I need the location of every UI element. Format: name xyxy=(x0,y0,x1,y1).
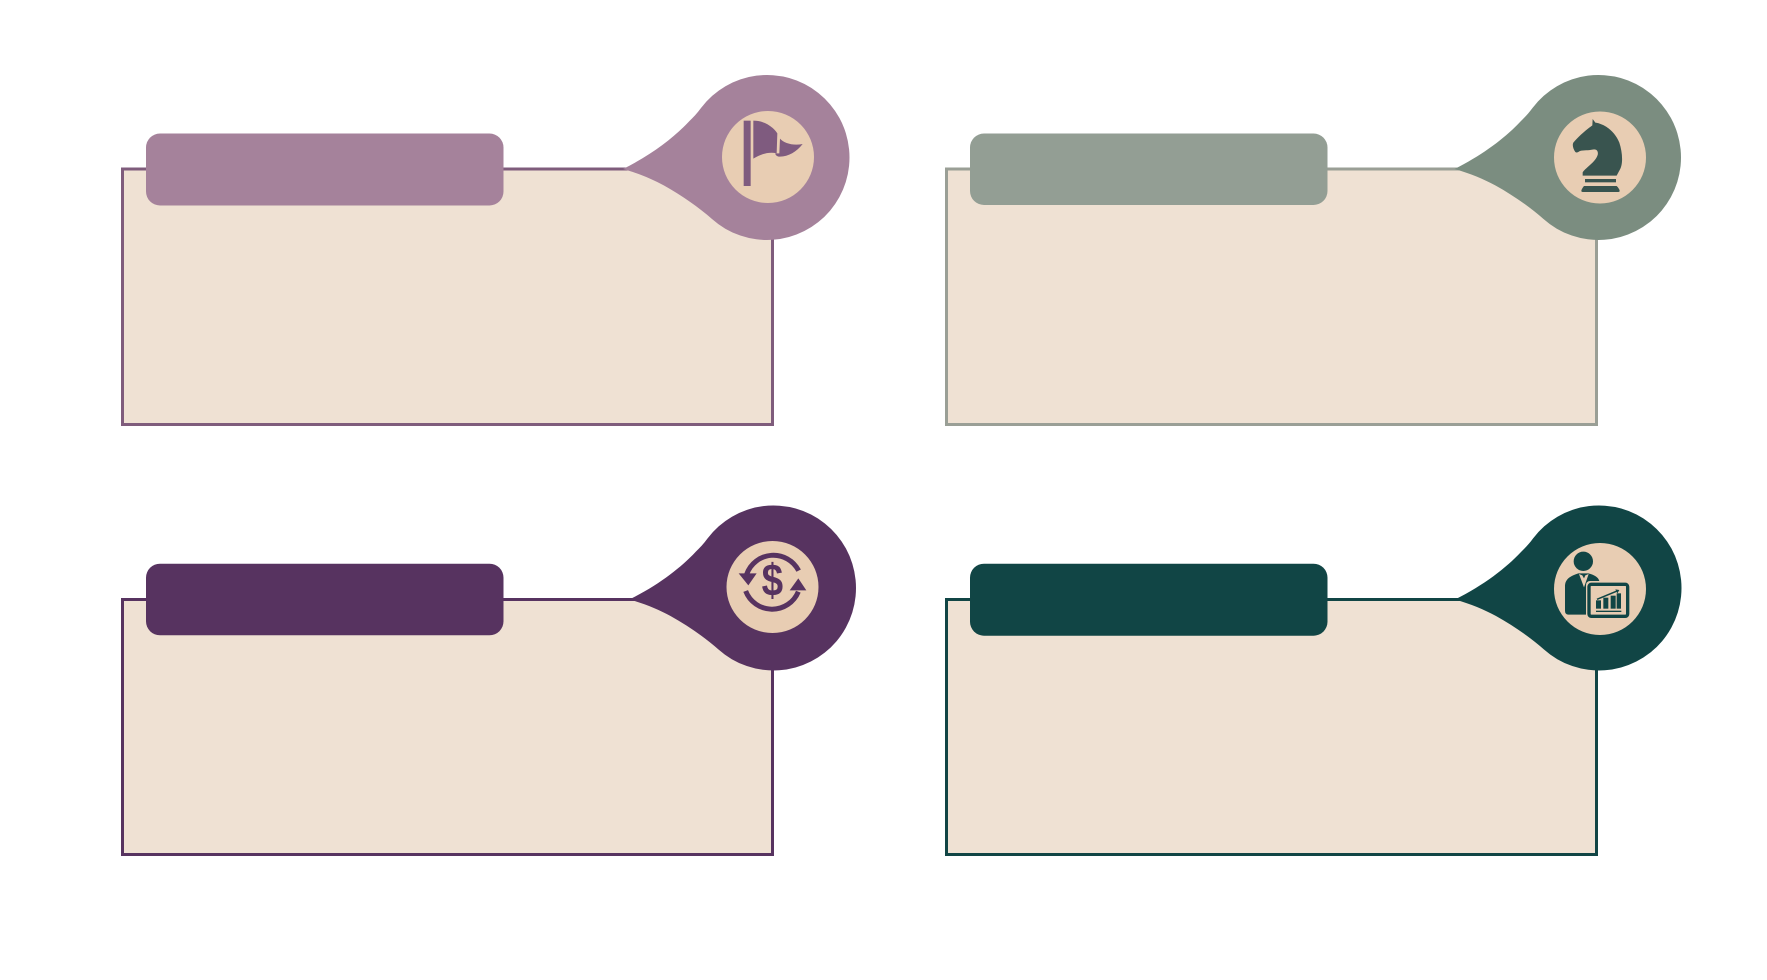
pin marker xyxy=(1455,506,1681,671)
icon: dollar exchange xyxy=(739,555,806,609)
heading bar xyxy=(146,564,504,635)
panel: bottom left xyxy=(122,506,856,854)
content box xyxy=(122,169,772,424)
icon disc xyxy=(1554,543,1646,635)
panel: top left xyxy=(122,75,849,424)
icon disc xyxy=(1554,112,1646,204)
icon: presenter with chart xyxy=(1565,552,1631,619)
content box xyxy=(946,169,1596,424)
pin marker xyxy=(630,506,856,671)
content box xyxy=(946,600,1596,854)
heading bar xyxy=(146,134,504,206)
heading bar xyxy=(970,134,1328,205)
heading bar xyxy=(970,564,1328,636)
icon disc xyxy=(726,541,818,633)
icon: dollar exchange: $ xyxy=(762,555,783,605)
icon disc xyxy=(722,111,814,203)
panel: top right xyxy=(946,75,1681,424)
icon: flag xyxy=(744,121,803,186)
pin marker xyxy=(623,75,849,240)
icon: chess knight xyxy=(1573,119,1622,192)
panel: bottom right xyxy=(946,506,1681,854)
pin marker xyxy=(1454,75,1681,240)
content box xyxy=(122,600,772,854)
